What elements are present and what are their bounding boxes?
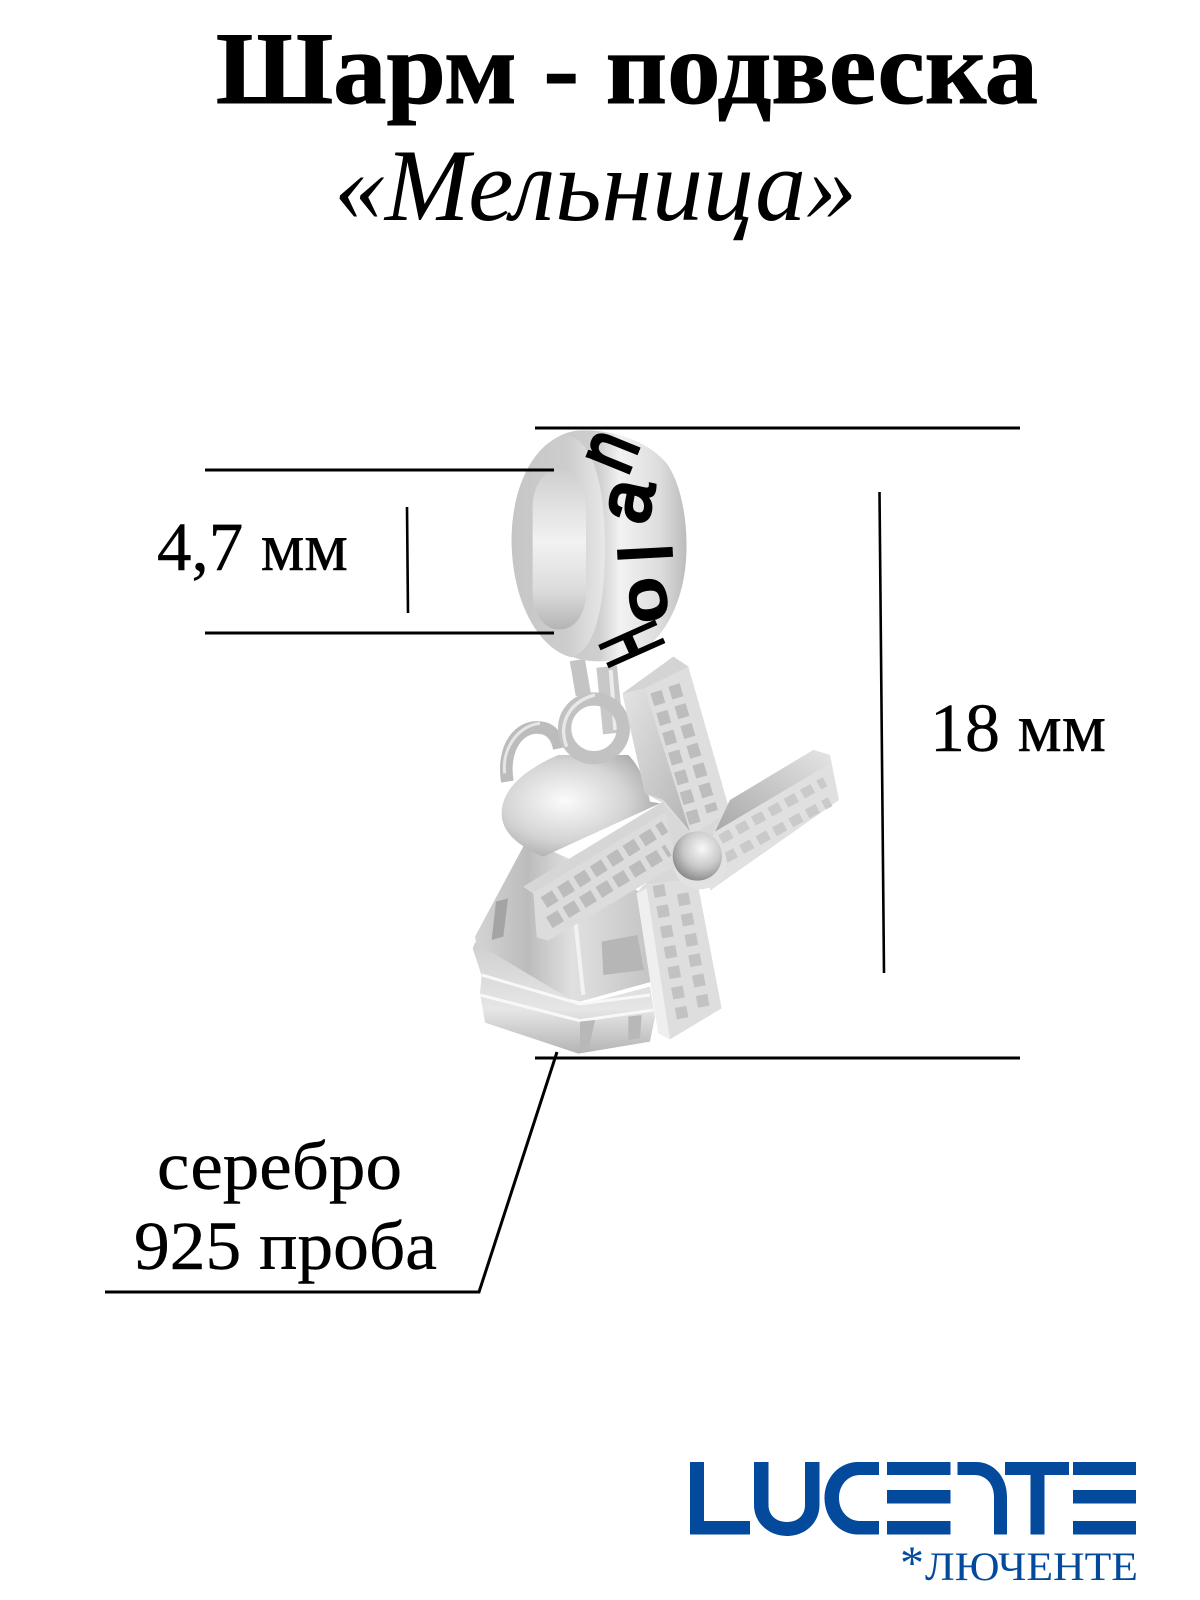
hallmark [492,898,508,940]
base highlights [480,975,653,1021]
label: 18 мм: 18 мм [930,690,1106,766]
ring hole [533,470,586,629]
charm illustration: windmill [473,657,839,1054]
ring barrel [512,430,687,661]
base detail [580,1015,642,1052]
dimension: charm height [535,426,1106,1060]
upper blade [623,657,730,835]
ring lettering: n [557,416,657,483]
dimension: ring inner diameter [157,468,554,634]
center joint [643,802,730,888]
bail stems [577,660,615,733]
window [602,935,644,975]
label: 4,7 мм: 4,7 мм [157,509,348,585]
ring lettering: l [607,543,687,563]
title: Шарм - подвеска [216,12,1038,126]
left blade [523,802,677,941]
label: серебро: серебро [157,1128,402,1204]
ring lettering: a [580,471,671,529]
ring front rim [512,435,605,657]
base [473,942,655,1054]
logo caption: * [900,1537,924,1590]
ring lettering: H [583,610,682,677]
lower blade [637,878,722,1039]
jump ring [565,699,623,758]
subtitle: «Мельница» [334,129,857,243]
label: 925 проба: 925 проба [134,1208,437,1284]
tower facet highlight [572,887,583,995]
logo: LUCENTE [690,1462,1136,1536]
cap dome [502,755,660,857]
hub [673,831,727,889]
cap handle loop [504,723,559,782]
right blade [710,750,839,891]
ring lettering [557,416,687,677]
ring lettering: o [605,573,682,629]
logo caption: ЛЮЧЕНТЕ [925,1544,1138,1589]
material callout [105,1052,557,1292]
tower [475,843,652,1002]
logo caption [900,1537,1138,1590]
charm ring with lettering [512,416,687,677]
